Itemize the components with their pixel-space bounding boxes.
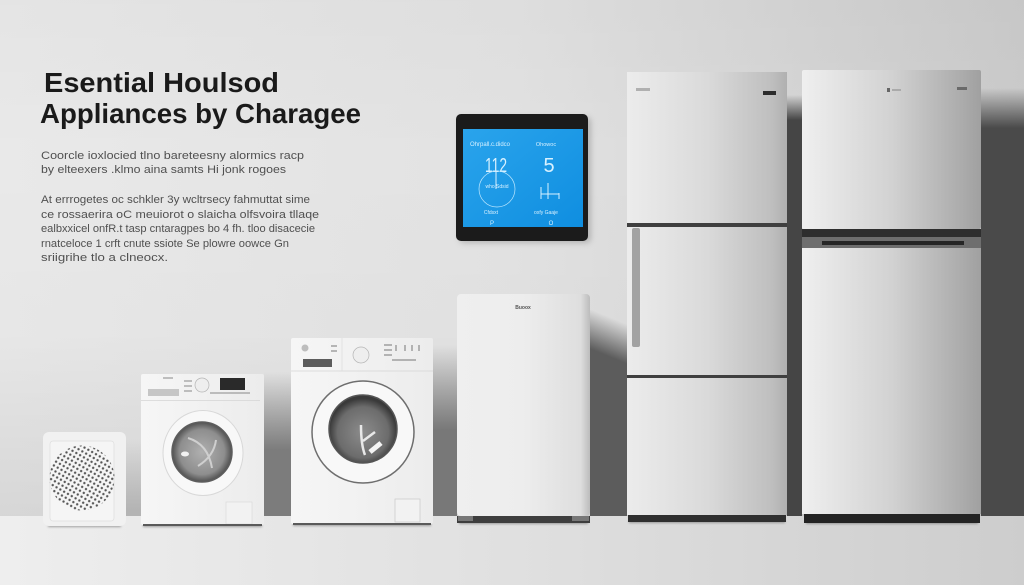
smart display tablet: oxfy Gaaje [534,210,558,216]
intro text block [41,150,304,176]
title: Esential Houlsod [44,67,279,98]
intro text block: by elteexers .klmo aina samts Hi jonk rogoes [41,164,287,176]
smart display tablet [456,114,591,243]
smart display tablet: 5 [543,155,555,177]
smart display tablet: Ohrpall.c.didco [470,142,511,148]
smart display tablet: O [549,221,554,227]
body text block: rnatceloce 1 crft cnute ssiote Se plowre oowce Gn [41,238,289,250]
intro text block: Coorcle ioxlocied tlno bareteesny alormics racp [41,150,304,162]
mini freezer [457,294,590,523]
small washing machine [141,374,264,526]
body text block: At errrogetes oc schkler 3y wcltrsecy fahmuttat sime [41,194,310,206]
large refrigerator [802,70,981,523]
floor contact shadows [48,520,978,527]
three-door refrigerator [627,72,787,522]
smart display tablet: who Sdsid [485,184,509,190]
floor [0,516,1024,585]
mini freezer: Buoox [515,305,531,311]
body text block: ce rossaerira oC meuiorot o slaicha olfsvoira tllaqe [41,209,319,221]
large washing machine [291,338,433,525]
smart display tablet: Ohowoc [536,142,556,148]
body text block [41,194,319,264]
appliance wall shadows [126,88,1024,516]
body text block: sriigrihe tlo a clneocx. [41,252,168,264]
title: Appliances by Charagee [40,98,361,129]
smart display tablet: P [490,221,494,227]
body text block: ealbxxicel onfR.t tasp cntaragpes bo 4 fh. tloo disacecie [41,223,315,235]
speaker / air purifier [43,432,126,526]
title [40,67,361,129]
smart display tablet: 112 [485,155,507,177]
smart display tablet: Cfdsxt [484,210,499,216]
